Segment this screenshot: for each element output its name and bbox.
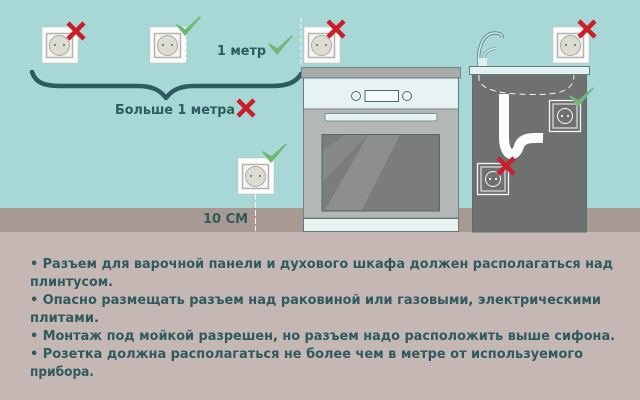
baseboard — [0, 208, 640, 232]
socket: next to oven, forbidden — [301, 17, 344, 66]
socket: above baseboard, allowed — [238, 144, 286, 231]
socket: below siphon, forbidden — [478, 158, 514, 194]
socket: far left, forbidden — [42, 23, 84, 63]
faucet — [478, 33, 502, 66]
rules text block: • Опасно размещать разъем над раковиной или газовыми, электрическими — [30, 292, 601, 308]
label: 1 metre — [217, 36, 292, 59]
rules text block: • Монтаж под мойкой разрешен, но разъем надо расположить выше сифона. — [30, 328, 615, 344]
knobs and display — [352, 90, 412, 102]
rules text block: плинтусом. — [30, 274, 113, 290]
oven body — [304, 109, 458, 218]
rules text block: • Розетка должна располагаться не более чем в метре от используемого — [30, 346, 583, 362]
rules text block: прибора. — [30, 364, 94, 380]
rules text block: плитами. — [30, 310, 99, 326]
label: 1 metre: 1 метр — [217, 44, 266, 59]
control panel — [304, 78, 458, 109]
rules text block: • Разъем для варочной панели и духового шкафа должен располагаться над — [30, 256, 613, 272]
brace — [32, 72, 301, 98]
floor panel — [0, 232, 640, 400]
sink top — [470, 66, 590, 74]
label: 10 cm: 10 СМ — [203, 212, 248, 227]
bottom strip — [304, 218, 458, 232]
socket: one metre from oven, allowed — [150, 17, 200, 63]
basin dashed outline — [479, 75, 574, 95]
rules text block — [30, 256, 615, 380]
handle — [325, 114, 437, 121]
countertop — [302, 68, 460, 78]
siphon pipe — [504, 94, 543, 154]
cabinet body — [472, 74, 586, 232]
wall background — [0, 0, 640, 208]
sink cabinet — [470, 33, 593, 232]
socket: above sink, forbidden — [553, 21, 595, 63]
oven window — [322, 134, 440, 211]
label: more than 1 metre: Больше 1 метра — [115, 103, 235, 118]
oven — [302, 68, 460, 232]
socket: above siphon, allowed — [550, 88, 593, 132]
